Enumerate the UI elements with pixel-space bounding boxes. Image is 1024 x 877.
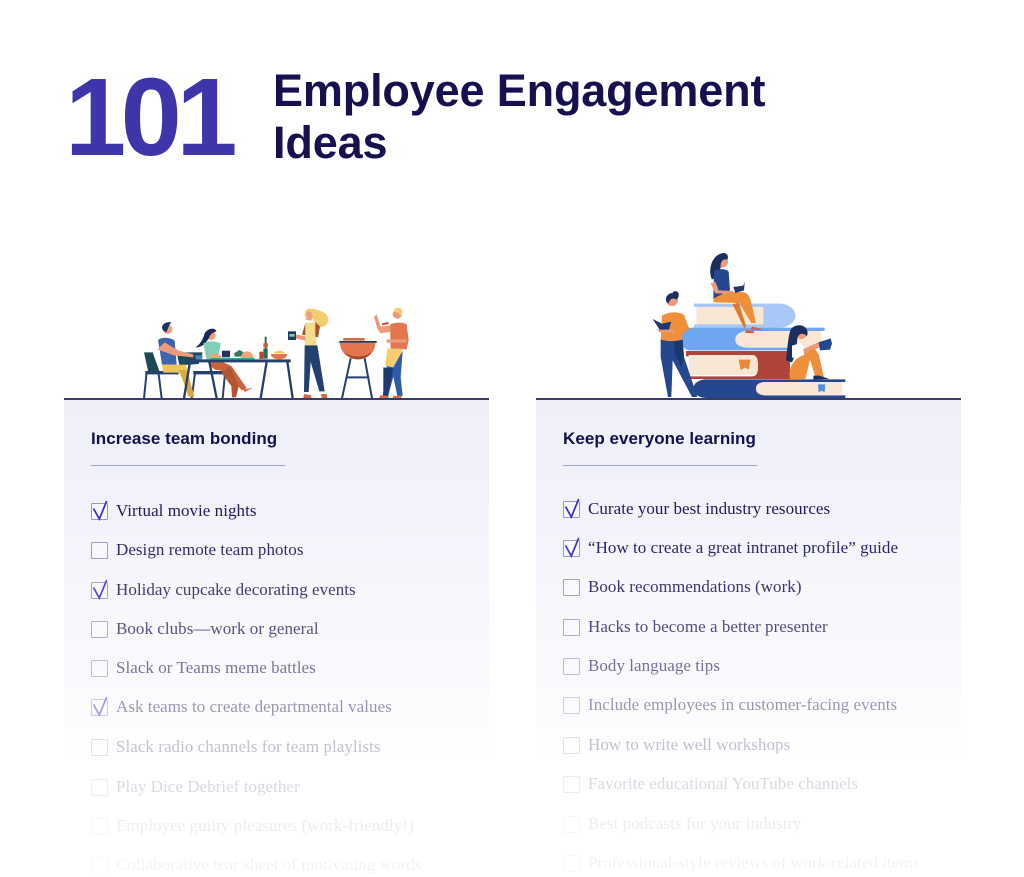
item 3: Holiday cupcake decorating events bbox=[116, 580, 356, 599]
item 4: Book clubs—work or general bbox=[116, 619, 319, 638]
item 2: Design remote team photos bbox=[116, 540, 304, 559]
big number 101: 101 bbox=[65, 56, 232, 179]
item 7: Slack radio channels for team playlists bbox=[116, 737, 381, 756]
item 6: Ask teams to create departmental values bbox=[116, 697, 392, 716]
heading: increase team bonding: Increase team bonding bbox=[91, 429, 277, 448]
item 8: Play Dice Debrief together bbox=[116, 777, 300, 796]
item 8: Favorite educational YouTube channels bbox=[588, 774, 858, 793]
checklist: team bonding bbox=[91, 500, 421, 874]
panel: increase team bonding bbox=[64, 398, 489, 877]
illustration: team barbecue bbox=[143, 308, 409, 398]
item 5: Slack or Teams meme battles bbox=[116, 658, 316, 677]
item 1: Curate your best industry resources bbox=[588, 499, 830, 518]
item 9: Best podcasts for your industry bbox=[588, 814, 802, 833]
title: Ideas bbox=[273, 117, 387, 168]
title: Employee Engagement bbox=[273, 65, 765, 116]
item 9: Employee guilty pleasures (work-friendly!) bbox=[116, 816, 414, 835]
item 3: Book recommendations (work) bbox=[588, 577, 802, 596]
item 10: Collaborative tear sheet of motivating words bbox=[116, 855, 421, 874]
illustration: stack of books bbox=[652, 253, 846, 398]
item 4: Hacks to become a better presenter bbox=[588, 617, 828, 636]
item 2: “How to create a great intranet profile” guide bbox=[588, 538, 898, 557]
heading: keep everyone learning: Keep everyone learning bbox=[563, 429, 756, 448]
item 5: Body language tips bbox=[588, 656, 720, 675]
item 6: Include employees in customer-facing events bbox=[588, 695, 897, 714]
title bbox=[273, 65, 765, 168]
item 7: How to write well workshops bbox=[588, 735, 790, 754]
item 10: Professional-style reviews of work-related items bbox=[588, 853, 919, 872]
panel: keep everyone learning bbox=[536, 398, 961, 877]
checklist: learning bbox=[563, 498, 919, 872]
item 1: Virtual movie nights bbox=[116, 501, 256, 520]
